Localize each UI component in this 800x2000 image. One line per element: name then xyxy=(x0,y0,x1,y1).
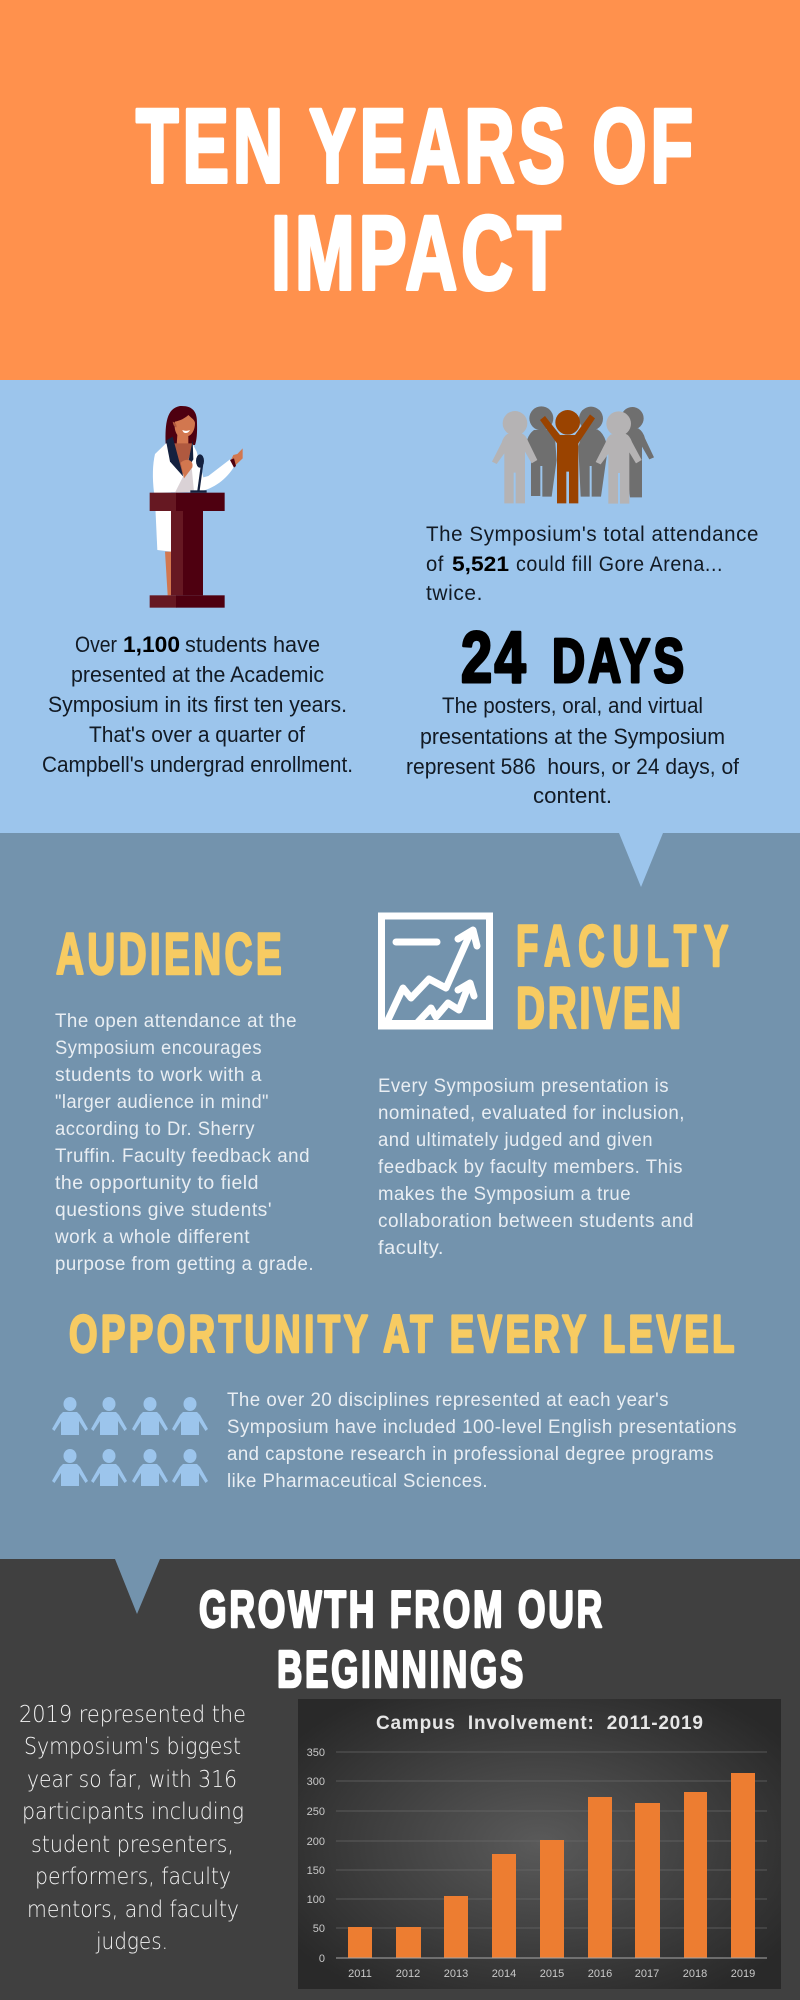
text: students presented: Symposium in its first ten years. xyxy=(48,692,347,717)
text: growth description xyxy=(19,1702,246,1955)
panel: growth xyxy=(0,1559,800,2000)
heading: audience: AUDIENCE xyxy=(56,922,285,987)
title xyxy=(136,88,697,312)
y axis labels: 250 xyxy=(307,1806,325,1818)
heading: growth from our beginnings: GROWTH FROM OUR xyxy=(199,1581,605,1639)
y axis labels: 200 xyxy=(307,1836,325,1848)
text: faculty description: collaboration between students and xyxy=(378,1211,694,1232)
panel: key statistics xyxy=(0,380,800,833)
text: hours of content: The posters, oral, and virtual xyxy=(442,693,703,718)
text: students presented: Over xyxy=(75,632,117,657)
text: total attendance: of xyxy=(426,553,444,576)
text: growth description: 2019 represented the xyxy=(19,1702,246,1728)
icon: rows of people xyxy=(52,1397,208,1486)
text: audience description: "larger audience in mind" xyxy=(55,1092,269,1113)
y axis labels: 0 xyxy=(319,1953,325,1965)
heading: faculty driven: DRIVEN xyxy=(516,976,684,1041)
icon: rising line chart xyxy=(378,916,493,1029)
text: growth description: performers, faculty xyxy=(35,1864,231,1890)
title: IMPACT xyxy=(271,195,565,312)
y axis labels: 50 xyxy=(313,1923,325,1935)
text: students presented: presented at the Academic xyxy=(71,662,324,687)
text: total attendance: twice. xyxy=(426,582,483,605)
text: faculty description: Every Symposium presentation is xyxy=(378,1076,669,1097)
text: total attendance xyxy=(426,523,759,605)
x axis labels: 2012 xyxy=(396,1968,420,1980)
text: opportunity description: The over 20 disciplines represented at each year's xyxy=(227,1390,669,1411)
chart title: Campus Involvement: 2011-2019 xyxy=(376,1713,703,1734)
y axis labels: 100 xyxy=(307,1894,325,1906)
text: faculty description: and ultimately judged and given xyxy=(378,1130,653,1151)
text: growth description: year so far, with 316 xyxy=(27,1767,237,1793)
icon: presenter at podium xyxy=(150,406,243,608)
text: faculty description: makes the Symposium a true xyxy=(378,1184,631,1205)
x axis labels: 2015 xyxy=(540,1968,564,1980)
text: audience description: the opportunity to field xyxy=(55,1173,259,1194)
text: hours of content: represent 586 hours, or 24 days, of xyxy=(406,754,740,779)
bars xyxy=(348,1773,755,1958)
y axis labels: 300 xyxy=(307,1776,325,1788)
arrow: blue speech pointer xyxy=(619,833,663,887)
text: growth description: mentors, and faculty xyxy=(27,1897,239,1923)
text: growth description: participants including xyxy=(22,1799,244,1825)
x axis labels: 2014 xyxy=(492,1968,516,1980)
text: students presented: That's over a quarter of xyxy=(89,722,306,747)
text: faculty description: feedback by faculty members. This xyxy=(378,1157,683,1178)
text: growth description: Symposium's biggest xyxy=(24,1734,241,1760)
heading: growth from our beginnings xyxy=(199,1581,605,1699)
text: total attendance: could fill Gore Arena... xyxy=(516,553,723,576)
text: students presented: Campbell's undergrad enrollment. xyxy=(42,752,353,777)
text: hours of content: presentations at the Symposium xyxy=(420,724,725,749)
text: students presented: 1,100 xyxy=(123,632,180,657)
heading: growth from our beginnings: BEGINNINGS xyxy=(277,1641,526,1699)
x axis labels xyxy=(348,1968,755,1980)
text: audience description: according to Dr. Sherry xyxy=(55,1119,255,1140)
heading: 24 days: 24 xyxy=(461,618,528,698)
text: audience description: Symposium encourages xyxy=(55,1038,262,1059)
text: faculty description: nominated, evaluated for inclusion, xyxy=(378,1103,685,1124)
text: faculty description xyxy=(378,1076,694,1259)
y axis labels xyxy=(307,1747,325,1965)
x axis labels: 2011 xyxy=(348,1968,372,1980)
heading: 24 days: DAYS xyxy=(552,627,687,696)
panel: audience and faculty xyxy=(0,833,800,1559)
text: hours of content: content. xyxy=(533,783,612,808)
text: audience description: Truffin. Faculty feedback and xyxy=(55,1146,310,1167)
text: opportunity description xyxy=(227,1390,737,1492)
x axis labels: 2018 xyxy=(683,1968,707,1980)
x axis labels: 2013 xyxy=(444,1968,468,1980)
text: audience description xyxy=(54,1011,314,1275)
y axis labels: 150 xyxy=(307,1865,325,1877)
x axis labels: 2019 xyxy=(731,1968,755,1980)
y axis labels: 350 xyxy=(307,1747,325,1759)
text: hours of content xyxy=(406,693,740,808)
panel: title header xyxy=(0,0,800,380)
text: students presented xyxy=(42,632,353,777)
text: opportunity description: and capstone research in professional degree programs xyxy=(227,1444,714,1465)
text: students presented: students have xyxy=(185,632,320,657)
heading: 24 days xyxy=(461,618,687,698)
text: growth description: student presenters, xyxy=(31,1832,234,1858)
bar chart: campus involvement xyxy=(298,1699,781,1989)
text: audience description: purpose from getting a grade. xyxy=(55,1254,314,1275)
text: audience description: The open attendance at the xyxy=(55,1011,297,1032)
text: audience description: students to work with a xyxy=(55,1065,262,1086)
text: total attendance: 5,521 xyxy=(452,553,509,576)
x axis labels: 2016 xyxy=(588,1968,612,1980)
text: total attendance: The Symposium's total attendance xyxy=(426,523,759,546)
text: faculty description: faculty. xyxy=(378,1238,444,1259)
arrow: slate speech pointer xyxy=(115,1559,160,1614)
text: opportunity description: Symposium have included 100-level English presentations xyxy=(227,1417,737,1438)
x axis labels: 2017 xyxy=(635,1968,659,1980)
text: audience description: questions give students' xyxy=(55,1200,272,1221)
text: opportunity description: like Pharmaceutical Sciences. xyxy=(227,1471,488,1492)
text: growth description: judges. xyxy=(95,1929,168,1955)
heading: faculty driven xyxy=(516,914,736,1041)
text: audience description: work a whole different xyxy=(54,1227,250,1248)
icon: crowd of people xyxy=(492,406,654,504)
